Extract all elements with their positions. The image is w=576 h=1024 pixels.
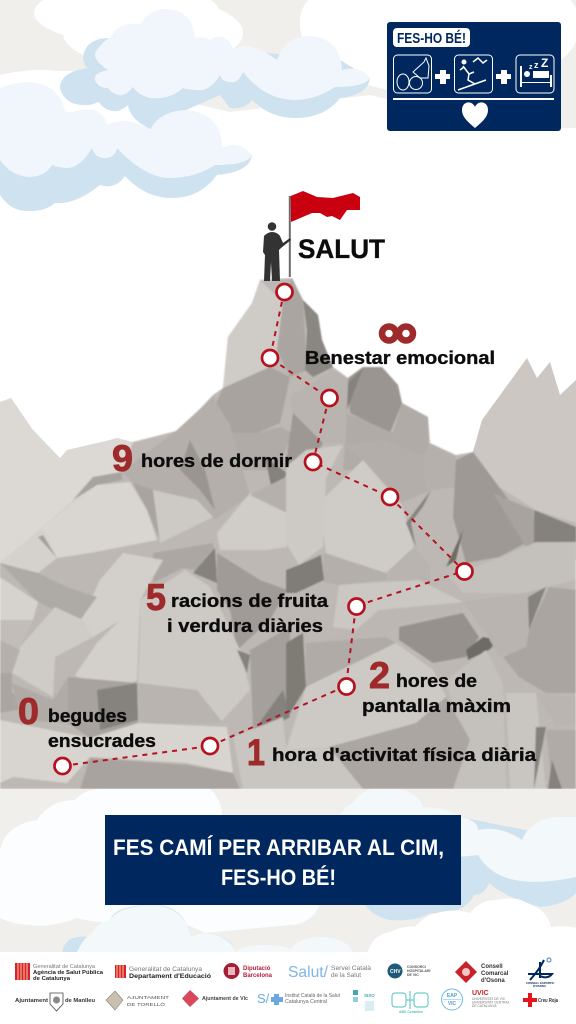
logo: EAP Vic: VIC <box>448 1001 457 1007</box>
logo: Institut Català de la Salut: S/ <box>257 991 270 1006</box>
label: 9 hours of sleep: 9 <box>112 438 133 479</box>
label: 0 sugary drinks: ensucrades <box>48 731 156 751</box>
logo: Agència de Salut Pública: de Catalunya <box>33 976 71 982</box>
logo: UVic: DE CATALUNYA <box>472 1004 497 1008</box>
logo: Ajuntament de Torelló: DE TORELLÓ <box>127 1001 166 1007</box>
label: 1 hour of physical activity <box>247 732 537 773</box>
label: 1 hour of physical activity: 1 <box>247 732 265 773</box>
icon: fruit <box>394 55 432 93</box>
white lower right cloud <box>368 898 576 952</box>
badge: FES-HO BÉ <box>387 22 561 131</box>
heading: SALUT: SALUT <box>298 234 385 264</box>
logo: Consell Comarcal d'Osona: Consell <box>481 964 503 970</box>
logo: Ajuntament de Vic <box>182 990 248 1007</box>
logo: CHV: CHV <box>390 969 401 975</box>
label: 9 hours of sleep <box>112 438 292 479</box>
logo: Diputació Barcelona: Barcelona <box>243 973 273 979</box>
logo: Consell Esportiu d'Osona: D'OSONA <box>533 984 546 988</box>
banner: FES-HO BÉ! <box>221 865 336 890</box>
logo: Ajuntament de Manlleu: de Manlleu <box>65 998 95 1004</box>
infinity symbol <box>382 326 413 340</box>
sky clouds <box>0 0 576 211</box>
label: 0 sugary drinks: 0 <box>18 691 39 732</box>
logos row 1 <box>15 958 554 988</box>
logo: UVic <box>472 990 510 1008</box>
icon: plus <box>435 70 450 84</box>
logo: SISO: SISO <box>364 993 375 998</box>
logo: Institut Català de la Salut: Institut Català de la Salut <box>285 993 340 999</box>
logo: Consell Esportiu d'Osona <box>526 958 554 988</box>
logo: Salut: Salut/ <box>288 964 329 981</box>
label: 2 hours of screen <box>362 655 511 716</box>
label: 2 hours of screen: 2 <box>369 655 390 696</box>
logo: CHV: CONSORCI <box>407 965 426 969</box>
icon: bed: z <box>529 64 533 71</box>
logo: Diputació Barcelona <box>224 963 273 979</box>
label: 2 hours of screen: hores de <box>396 671 477 691</box>
logo: Salut: de la Salut <box>331 973 361 979</box>
peak facets <box>193 278 430 470</box>
label: 5 fruit and vegetable servings: racions de fruita <box>171 591 329 611</box>
logo: EAP Vic <box>442 989 462 1010</box>
path dashes <box>62 292 464 766</box>
logo: Departament d'Educació: Departament d'Educació <box>129 973 211 980</box>
main mountain <box>0 278 576 789</box>
logo: Institut Català de la Salut: Catalunya Central <box>285 999 327 1005</box>
icon: bed: Z <box>541 56 548 70</box>
large pale left cloud <box>0 789 320 933</box>
label: 9 hours of sleep: hores de dormir <box>141 451 292 471</box>
upper cloud <box>60 38 370 130</box>
icon: skier <box>454 55 492 93</box>
icon: heart <box>462 102 488 128</box>
logo: CHV <box>388 964 430 978</box>
logo: Consell Comarcal d'Osona: d'Osona <box>481 978 505 984</box>
logo: Consell Esportiu d'Osona: CONSELL ESPORTIU <box>526 981 554 985</box>
logo: UVic: UNIVERSITAT DE VIC <box>472 997 506 1001</box>
logo: Departament d'Educació: Generalitat de Catalunya <box>129 966 202 973</box>
icon: plus <box>496 70 511 84</box>
left facets <box>0 397 324 789</box>
label: 5 fruit and vegetable servings: i verdura diàries <box>167 616 323 636</box>
logo: Consell Comarcal d'Osona <box>455 961 509 984</box>
banner: FES CAMÍ PER ARRIBAR AL CIM, <box>113 835 444 860</box>
flag pole <box>289 196 291 277</box>
lower left pale cloud <box>62 905 235 952</box>
logo: CHV: HOSPITALARI <box>407 969 430 973</box>
label: 0 sugary drinks: begudes <box>48 706 127 726</box>
badge: FES-HO BÉ: FES-HO BÉ! <box>397 30 466 47</box>
label: emotional wellbeing: Benestar emocional <box>305 348 495 368</box>
blue cloud shadow <box>358 817 576 920</box>
far mountains <box>0 358 576 580</box>
logo: Institut Català de la Salut <box>257 991 340 1006</box>
label: 2 hours of screen: pantalla màxim <box>362 696 511 716</box>
logo: EAP Vic: EAP <box>447 993 458 999</box>
logo: Agència de Salut Pública <box>15 963 104 982</box>
logo: Diputació Barcelona: Diputació <box>243 966 271 972</box>
logo: UVic: UVIC <box>472 990 489 997</box>
logo: Salut <box>288 964 372 981</box>
logo: Ajuntament de Torelló <box>106 991 169 1010</box>
bottom band and clouds <box>0 789 576 952</box>
logo: Ajuntament de Manlleu: Ajuntament <box>15 998 48 1004</box>
logo: Salut: Servei Català <box>331 966 372 972</box>
footer <box>0 952 576 1024</box>
logo: Ajuntament de Vic: Ajuntament de Vic <box>202 996 248 1002</box>
logo: Agència de Salut Pública: Agència de Salut Pública <box>33 970 104 976</box>
logo: Agència de Salut Pública: Generalitat de Catalunya <box>33 964 96 970</box>
logo: Ajuntament de Torelló: AJUNTAMENT <box>127 995 169 1000</box>
figure with flag <box>263 191 360 281</box>
label: 5 fruit and vegetable servings: 5 <box>146 577 166 618</box>
logo: Creu Roja: Creu Roja <box>538 998 559 1004</box>
logo: CHV: DE VIC <box>407 973 419 977</box>
icon: bed: z <box>534 60 539 70</box>
label: 0 sugary drinks <box>18 691 156 751</box>
logo: ABS Centelles <box>392 991 428 1014</box>
logo: Ajuntament de Manlleu <box>15 993 95 1011</box>
logo: Departament d'Educació <box>115 965 211 980</box>
path nodes <box>54 284 472 774</box>
lower cloud <box>0 130 252 211</box>
logo: ABS Centelles: ABS Centelles <box>399 1010 423 1014</box>
right facets <box>286 440 576 789</box>
logo: Consell Comarcal d'Osona: Comarcal <box>481 971 509 977</box>
logos row 2 <box>15 989 559 1014</box>
flag <box>291 191 360 222</box>
logo: Creu Roja <box>523 993 559 1007</box>
logo: SISO <box>353 990 375 1011</box>
banner <box>105 815 461 905</box>
label: 1 hour of physical activity: hora d'activitat física diària <box>272 745 537 765</box>
pale right cloud <box>335 788 576 882</box>
label: 5 fruit and vegetable servings <box>146 577 329 636</box>
person <box>263 222 291 281</box>
logo: UVic: UNIVERSITAT CENTRAL <box>472 1000 510 1004</box>
icon: bed <box>516 55 554 93</box>
